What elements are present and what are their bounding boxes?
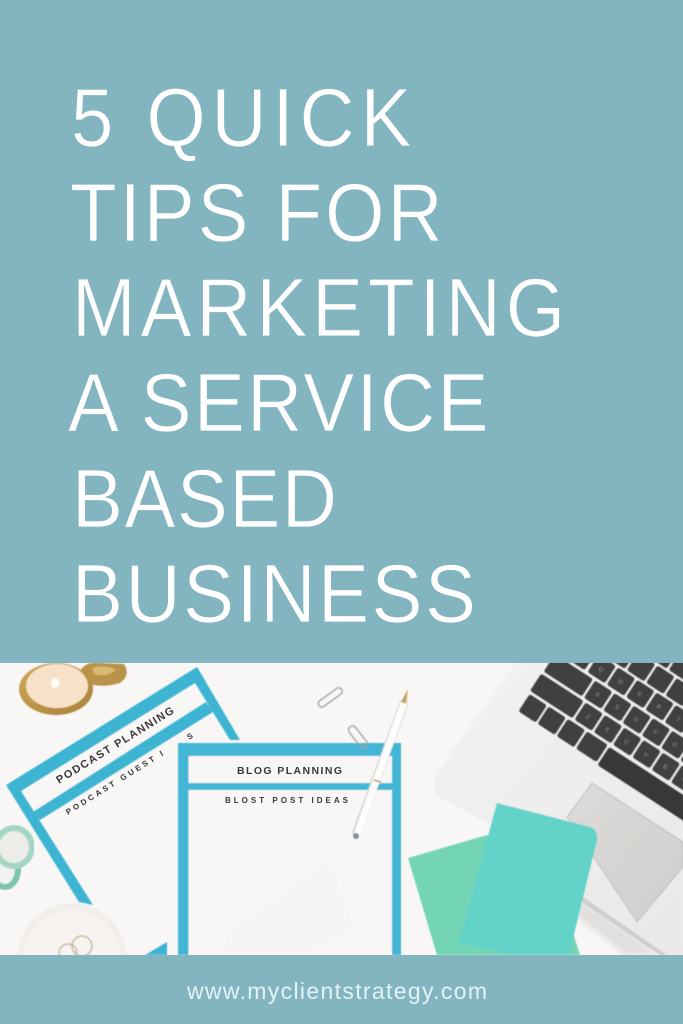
desk photo — [0, 663, 683, 955]
website url: www.myclientstrategy.com — [186, 978, 487, 1004]
podcast planning sheet — [6, 667, 240, 955]
keyboard: G — [671, 742, 678, 749]
keyboard: D — [632, 717, 640, 724]
keyboard: V — [642, 752, 649, 759]
podcast subheading: PODCAST GUEST I — [64, 749, 165, 817]
title: 5 QUICK — [71, 71, 411, 164]
blog heading: BLOG PLANNING — [237, 765, 342, 777]
keyboard: T — [674, 717, 681, 724]
keyboard: F — [652, 729, 658, 737]
keyboard: S — [613, 704, 620, 711]
keyboard: W — [616, 679, 624, 687]
keyboard: C — [623, 739, 630, 747]
blog planning sheet — [178, 743, 401, 955]
title: BASED — [72, 452, 337, 545]
ceramic bowl — [18, 904, 126, 955]
podcast subheading end: S — [185, 731, 195, 742]
title: A SERVICE — [68, 356, 488, 449]
blog subheading: BLOST POST IDEAS — [225, 796, 349, 805]
keyboard: A — [594, 692, 600, 699]
paperclips — [317, 686, 369, 750]
title: TIPS FOR — [70, 166, 443, 259]
notebooks — [408, 803, 597, 955]
keyboard: Z — [584, 714, 591, 721]
keyboard: B — [661, 764, 668, 771]
pen — [353, 689, 408, 839]
keyboard — [518, 663, 683, 822]
podcast heading: PODCAST PLANNING — [54, 705, 176, 787]
keyboard: X — [603, 727, 610, 734]
trackpad — [567, 783, 683, 922]
washi tape — [0, 828, 32, 887]
title: MARKETING — [72, 261, 565, 354]
keyboard: E — [636, 691, 642, 699]
keyboard: R — [655, 704, 662, 712]
keyboard: Q — [597, 666, 604, 674]
title — [68, 71, 565, 640]
laptop — [435, 663, 683, 955]
candle — [19, 663, 127, 715]
title: BUSINESS — [72, 547, 476, 640]
